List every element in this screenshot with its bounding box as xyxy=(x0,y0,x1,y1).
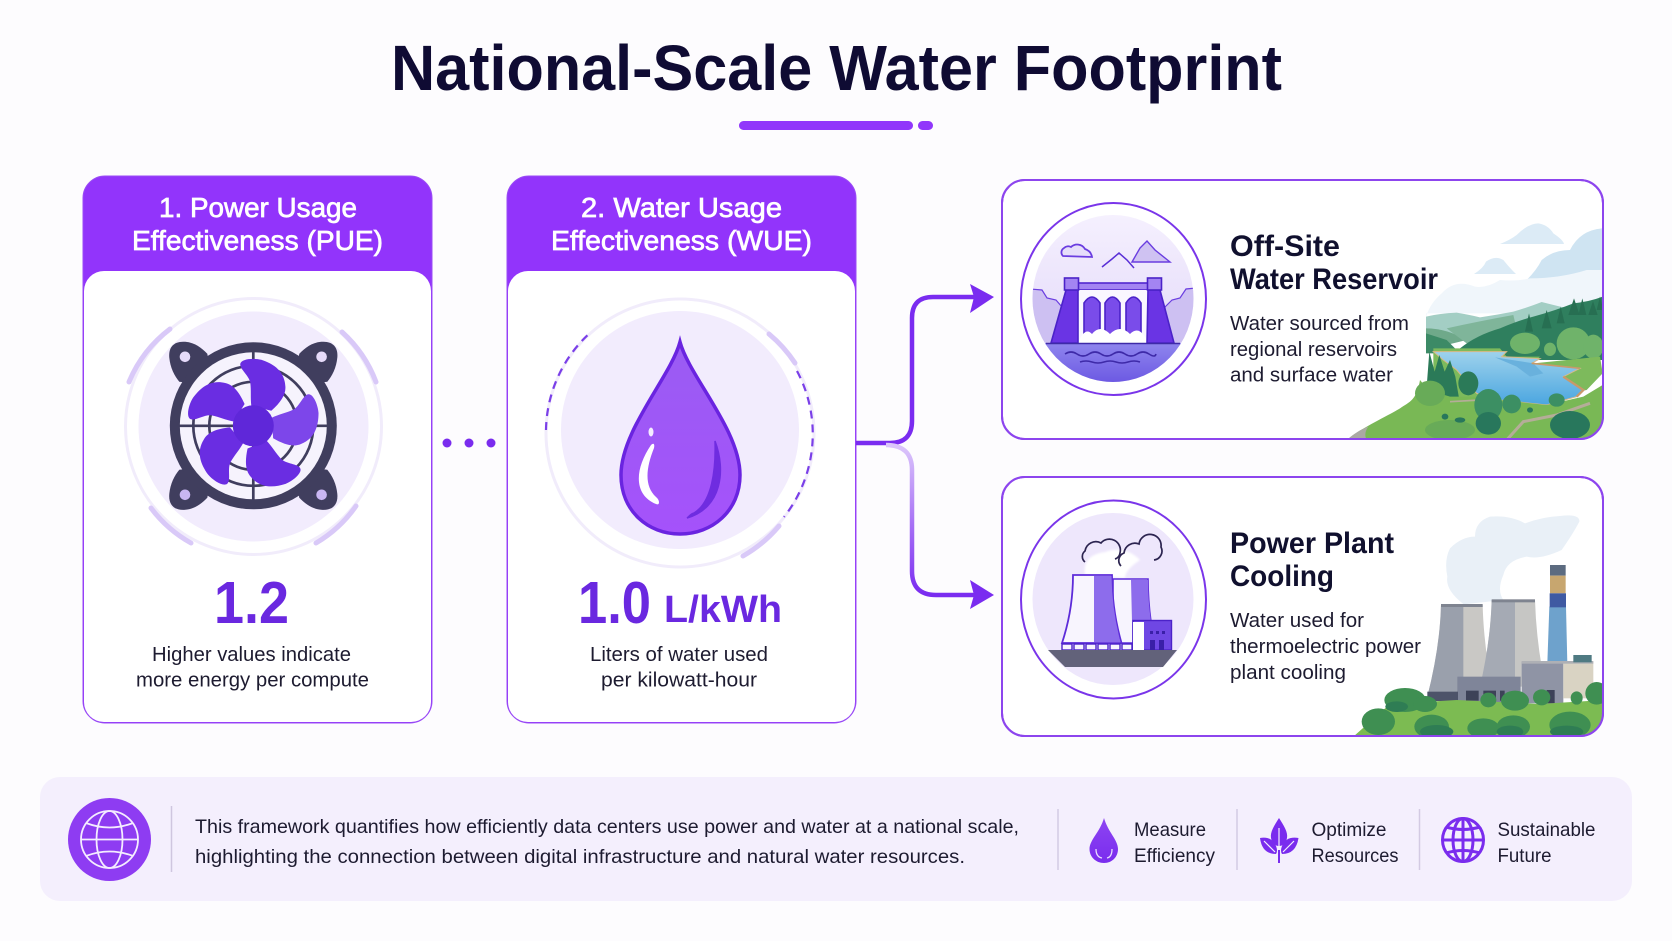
illustration: thermal power plant xyxy=(1353,515,1608,739)
heading: PUE: Effectiveness (PUE) xyxy=(132,225,383,256)
icon: optimize resources plant xyxy=(1260,818,1298,863)
icon: water drop xyxy=(546,299,814,567)
label: sustainable future: Sustainable xyxy=(1498,819,1596,841)
description: PUE xyxy=(136,644,369,692)
illustration: lake landscape xyxy=(1347,223,1603,440)
panel: framework summary footer xyxy=(40,777,1632,901)
heading: off-site water reservoir xyxy=(1230,230,1438,296)
heading: power plant cooling xyxy=(1230,527,1394,593)
heading: power plant cooling: Power Plant xyxy=(1230,527,1394,560)
panel: water usage effectiveness xyxy=(507,176,856,723)
arrow: to off-site water reservoir xyxy=(856,284,994,443)
label: sustainable future xyxy=(1498,819,1596,867)
arrow: to power plant cooling xyxy=(886,445,994,609)
icon: measure efficiency drop xyxy=(1090,818,1118,863)
label: measure efficiency: Measure xyxy=(1134,819,1206,841)
text: framework summary xyxy=(195,816,1019,868)
heading: WUE: Effectiveness (WUE) xyxy=(551,225,812,256)
description: WUE xyxy=(590,644,768,692)
description: power plant: thermoelectric power xyxy=(1230,636,1421,658)
description: reservoir: and surface water xyxy=(1230,364,1393,386)
heading: WUE xyxy=(551,192,812,256)
description: PUE: Higher values indicate xyxy=(152,644,351,666)
divider xyxy=(170,806,172,872)
text: framework summary: highlighting the connection between digital infrastructure and natural water resources. xyxy=(195,846,965,868)
description: WUE: per kilowatt-hour xyxy=(601,670,757,692)
heading: PUE xyxy=(132,192,383,256)
icon: sustainable future globe xyxy=(1442,818,1484,862)
label: optimize resources: Resources xyxy=(1312,845,1399,867)
icon: cooling fan xyxy=(126,298,382,554)
title underline accent xyxy=(739,121,933,130)
panel: power plant cooling xyxy=(1002,477,1608,739)
icon: cooling towers xyxy=(1021,500,1206,698)
icon: hydro dam xyxy=(1021,203,1206,395)
label: optimize resources: Optimize xyxy=(1312,819,1386,841)
description: reservoir xyxy=(1230,313,1409,386)
description: WUE: Liters of water used xyxy=(590,644,768,666)
value: 1.0 L/kWh: L/kWh xyxy=(664,589,782,631)
heading: WUE: 2. Water Usage xyxy=(581,192,782,223)
heading: PUE: 1. Power Usage xyxy=(159,192,357,223)
label: optimize resources xyxy=(1312,819,1399,867)
heading: power plant cooling: Cooling xyxy=(1230,560,1334,593)
label: measure efficiency xyxy=(1134,819,1215,867)
icon: globe badge xyxy=(68,798,151,881)
title: National-Scale Water Footprint xyxy=(391,32,1282,104)
description: power plant: plant cooling xyxy=(1230,662,1346,684)
heading: off-site water reservoir: Off-Site xyxy=(1230,230,1340,263)
value: 1.0 L/kWh xyxy=(578,570,782,636)
panel: power usage effectiveness xyxy=(83,176,432,723)
label: sustainable future: Future xyxy=(1498,845,1552,867)
text: framework summary: This framework quantifies how efficiently data centers use power and water at a national scale, xyxy=(195,816,1019,838)
description: reservoir: regional reservoirs xyxy=(1230,339,1397,361)
description: power plant xyxy=(1230,610,1421,684)
value: 1.0 L/kWh: 1.0 xyxy=(578,570,651,636)
connector: three dots xyxy=(442,438,496,448)
value: 1.2: 1.2 xyxy=(214,570,289,636)
description: reservoir: Water sourced from xyxy=(1230,313,1409,335)
description: PUE: more energy per compute xyxy=(136,670,369,692)
panel: off-site water reservoir xyxy=(1002,180,1603,440)
description: power plant: Water used for xyxy=(1230,610,1364,632)
label: measure efficiency: Efficiency xyxy=(1134,845,1215,867)
heading: off-site water reservoir: Water Reservoir xyxy=(1230,263,1438,296)
